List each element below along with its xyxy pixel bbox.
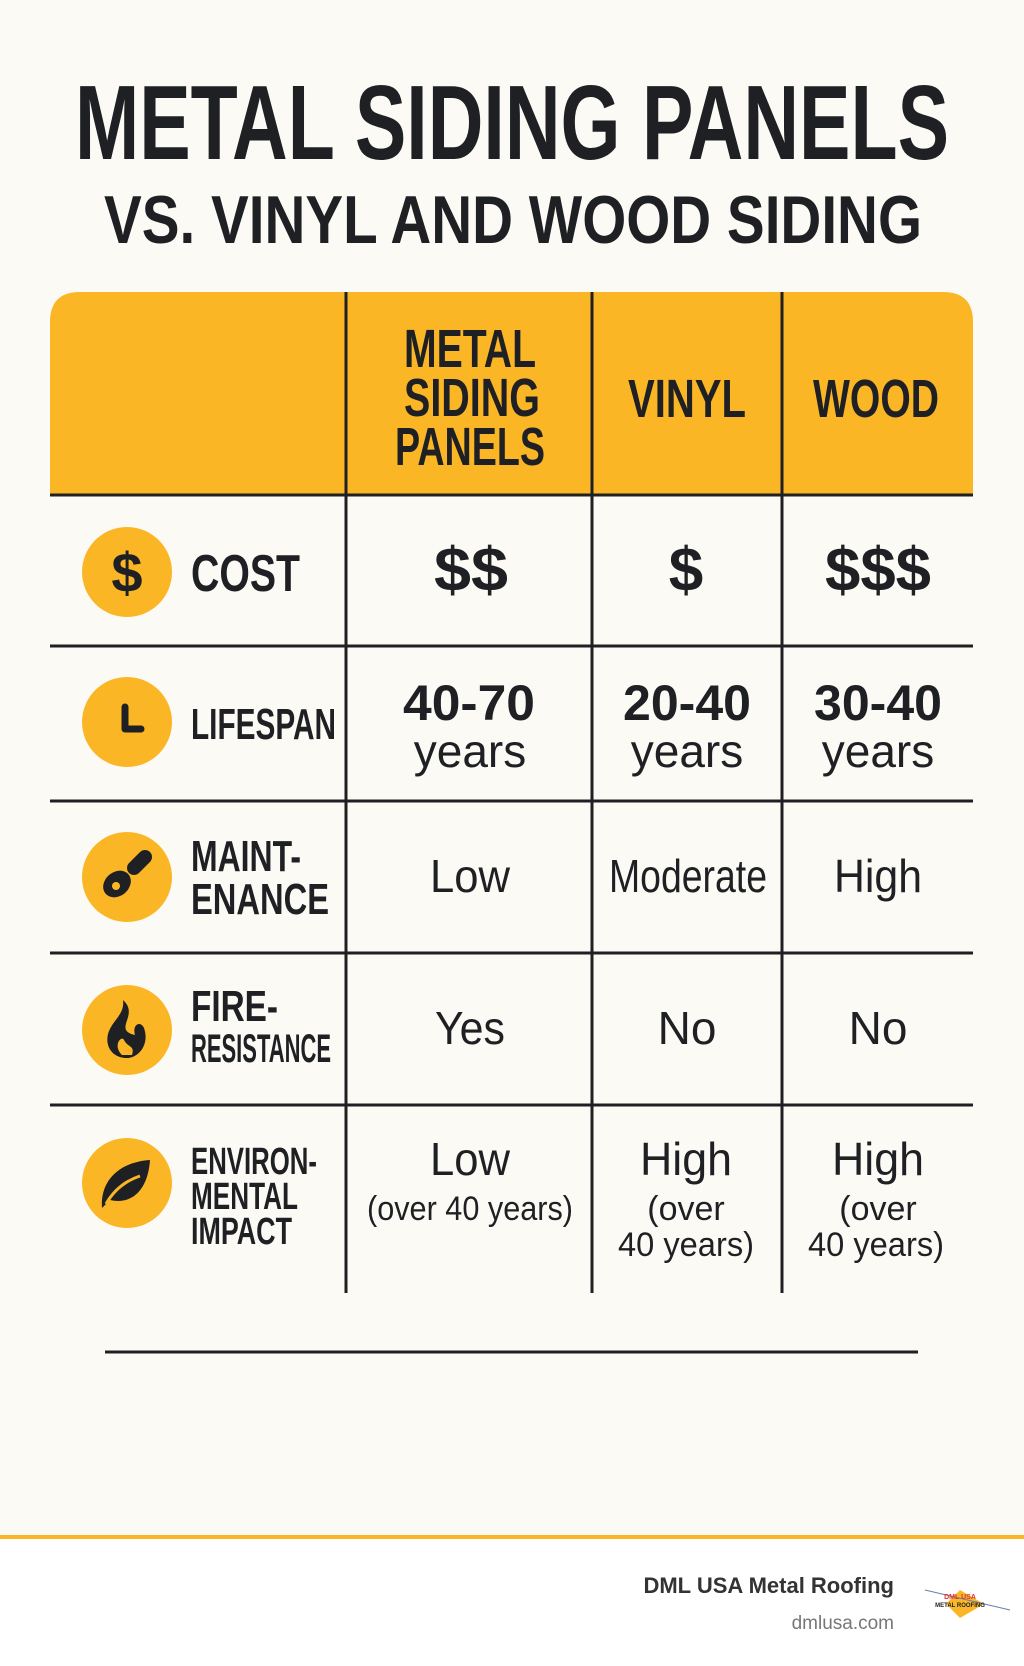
footer brand text: DML USA Metal Roofing (643, 1573, 894, 1598)
row: environmental impact: 40 years) (618, 1226, 754, 1264)
row: environmental impact: 40 years) (808, 1226, 944, 1264)
row: cost: $$ (434, 536, 508, 605)
icon: clock (82, 677, 172, 767)
footer: dmlusa.com (792, 1613, 894, 1634)
icon: brush (82, 832, 172, 922)
table header: PANELS (395, 417, 545, 477)
table header: METAL (404, 319, 536, 379)
row: fire resistance: RESISTANCE (191, 1027, 331, 1071)
row: environmental impact: IMPACT (191, 1211, 292, 1253)
row: environmental impact: Low (430, 1133, 511, 1185)
row: lifespan: LIFESPAN (191, 700, 336, 749)
row: fire resistance: No (658, 1002, 716, 1054)
row: cost: $ (669, 536, 703, 605)
row: lifespan: years (414, 725, 526, 777)
comparison table (50, 292, 973, 1293)
icon: dollar: $ (111, 541, 143, 604)
row: maintenance: ENANCE (191, 875, 329, 924)
footer (0, 1535, 1024, 1666)
row: maintenance: High (834, 850, 922, 902)
table header: WOOD (813, 369, 939, 429)
row: lifespan: years (822, 725, 934, 777)
row: lifespan: 30-40 (814, 675, 942, 731)
row: maintenance: Low (430, 850, 511, 902)
row: maintenance (82, 832, 922, 924)
row: lifespan: 40-70 (403, 675, 535, 731)
row: environmental impact: (over (839, 1190, 917, 1228)
row: cost (82, 527, 931, 617)
row: fire resistance: No (849, 1002, 907, 1054)
row: cost: COST (191, 545, 300, 603)
icon: dollar (82, 527, 172, 617)
row: fire resistance: FIRE- (191, 982, 278, 1031)
logo: METAL ROOFING (935, 1603, 985, 1609)
row: environmental impact: (over 40 years) (367, 1190, 573, 1228)
row: fire resistance: Yes (435, 1002, 505, 1054)
table header: SIDING (404, 368, 540, 428)
row: environmental impact: (over (647, 1190, 725, 1228)
row: environmental impact: High (832, 1133, 924, 1185)
row: environmental impact: ENVIRON- (191, 1141, 317, 1183)
table header (50, 292, 973, 495)
row: lifespan: 20-40 (623, 675, 751, 731)
icon: flame (82, 985, 172, 1075)
row: maintenance: Moderate (609, 850, 767, 902)
row: cost: $$$ (825, 536, 931, 605)
logo: DML USA (944, 1594, 976, 1601)
row: environmental impact (82, 1133, 944, 1264)
icon: leaf (82, 1138, 172, 1228)
row: lifespan: years (631, 725, 743, 777)
title (75, 64, 949, 258)
logo (925, 1590, 1010, 1618)
row: lifespan (82, 675, 942, 777)
row: environmental impact: High (640, 1133, 732, 1185)
table header: VINYL (628, 369, 746, 429)
row: environmental impact: MENTAL (191, 1176, 298, 1218)
row: fire resistance (82, 982, 907, 1075)
row: maintenance: MAINT- (191, 832, 301, 881)
